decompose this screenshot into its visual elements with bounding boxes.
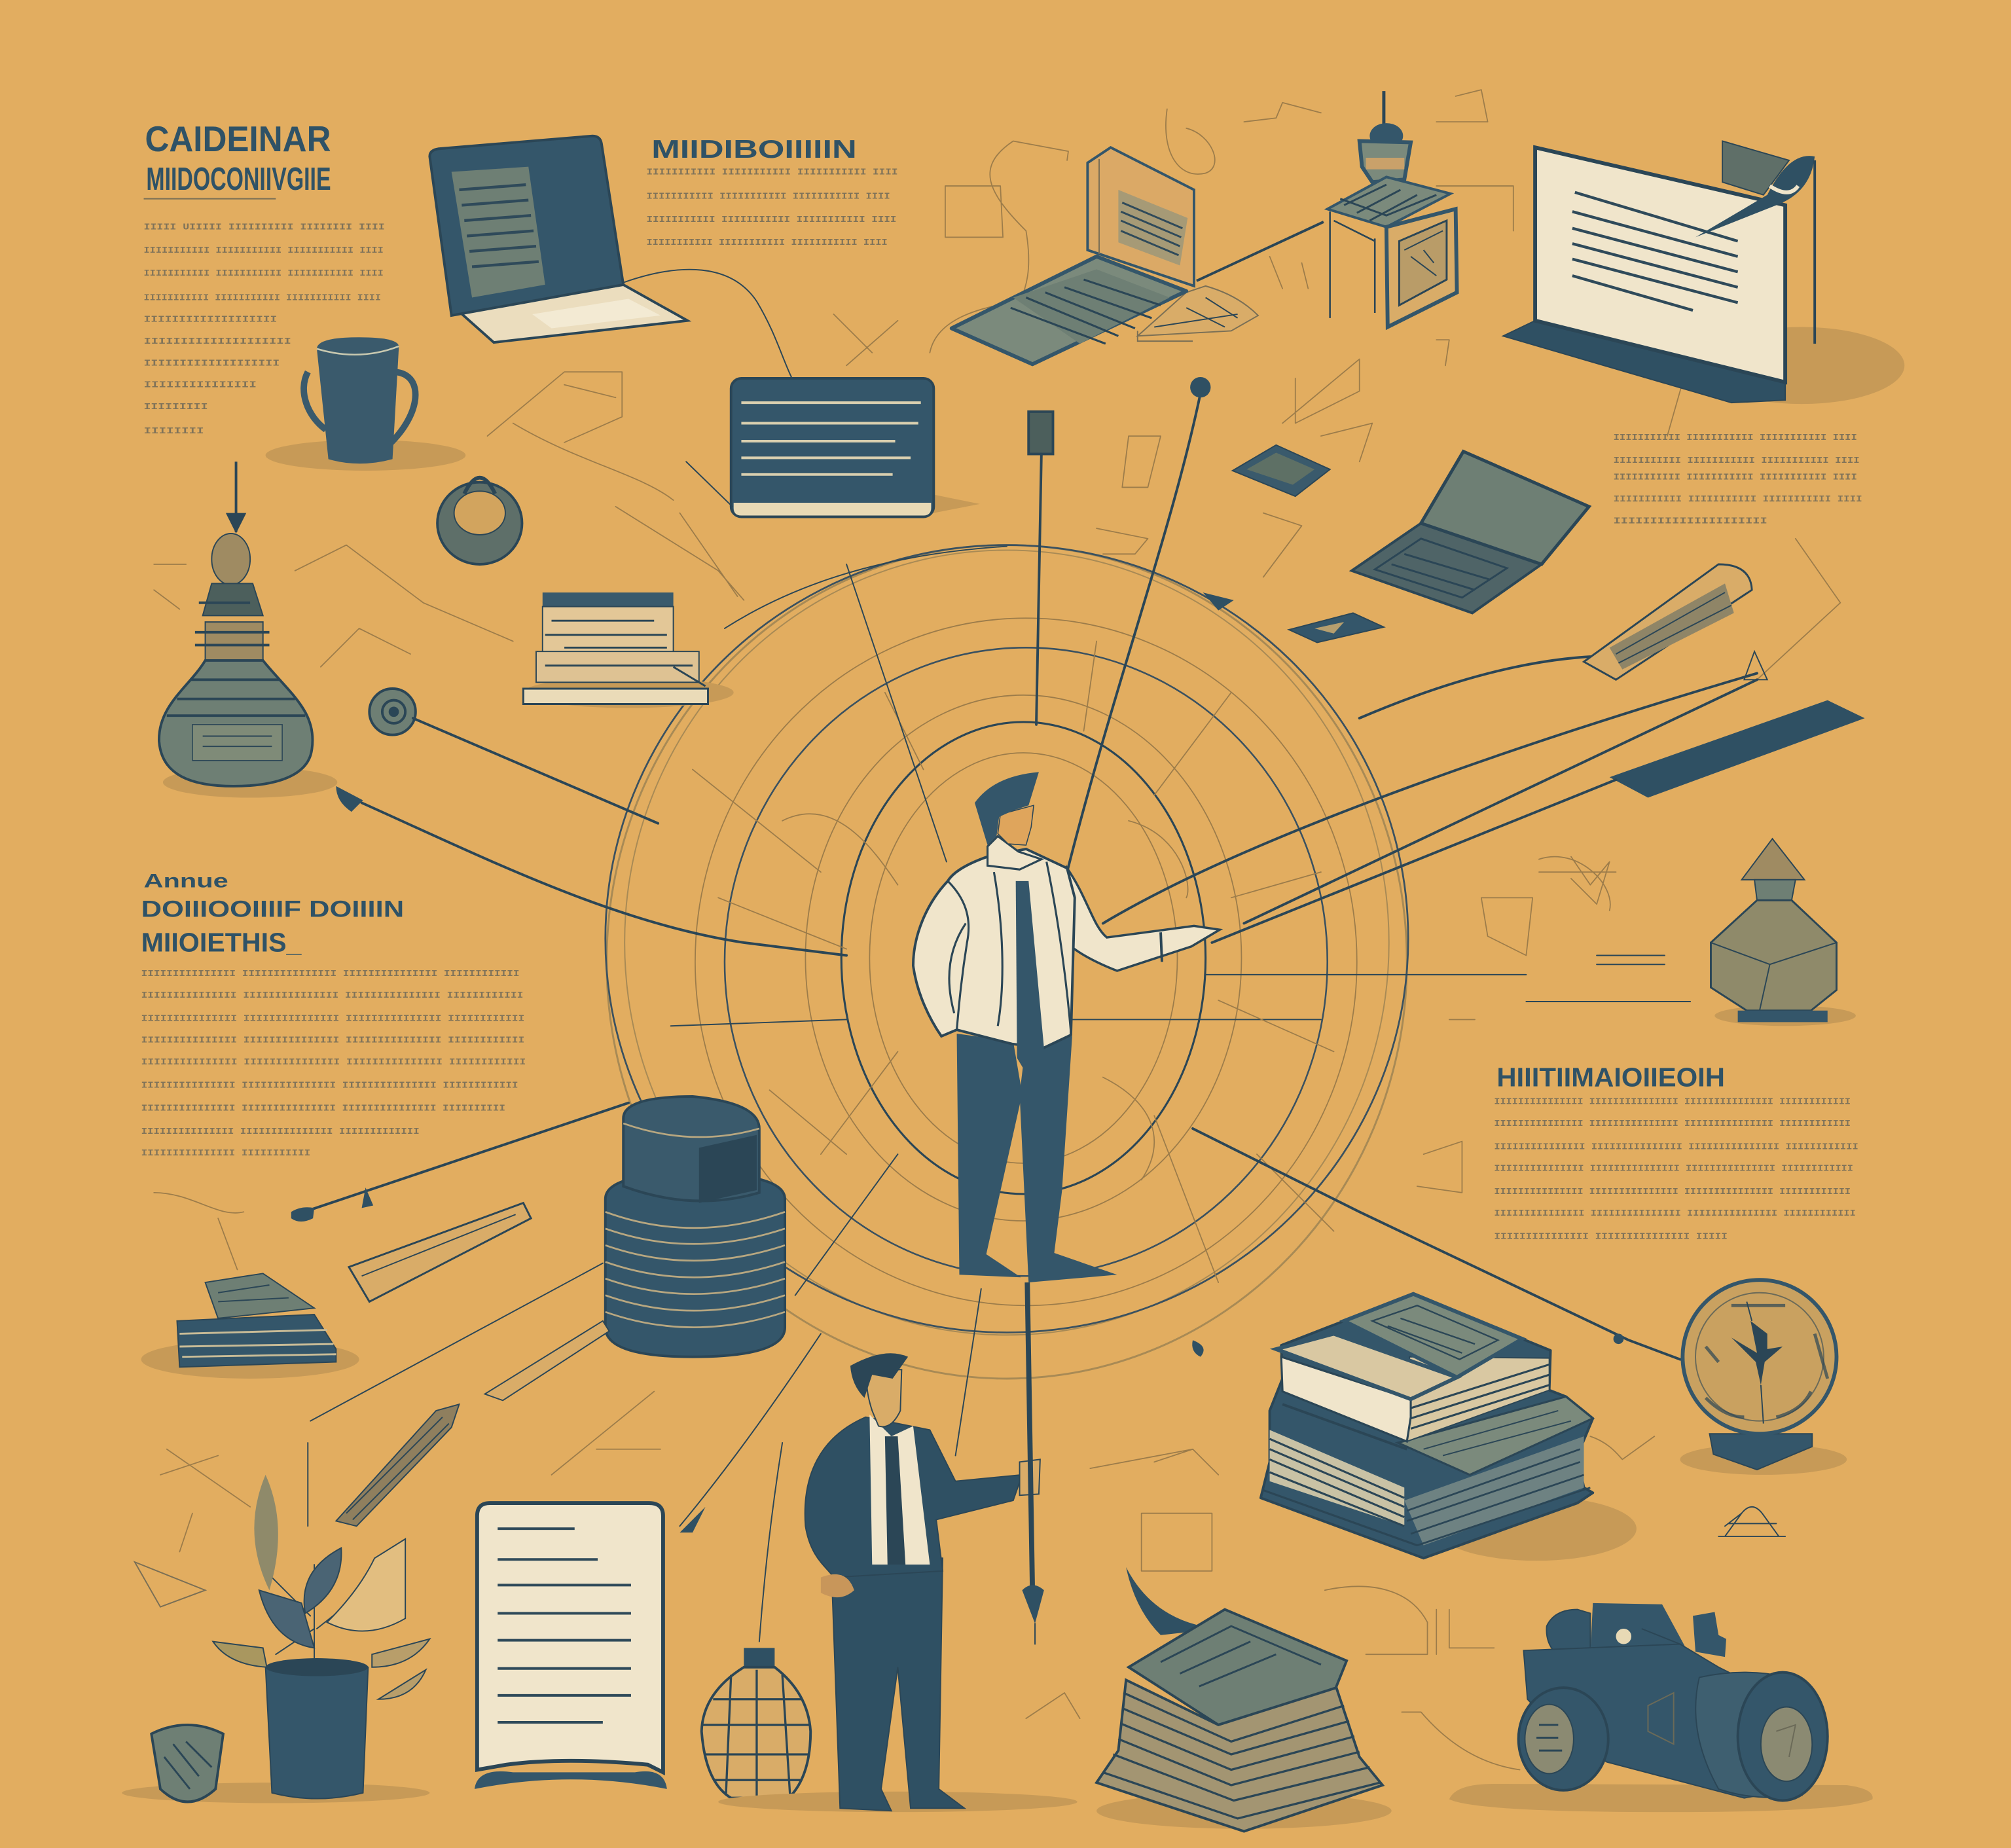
heading lines (141, 871, 404, 958)
body text: IIIII UIIIII IIIIIIIIII IIIIIIII IIII (144, 223, 385, 233)
gray cover (1398, 1396, 1593, 1475)
icon: paper stack bottom (1096, 1567, 1392, 1832)
body text: IIIIIIIIIIIIIII IIIIIIIIIIIIIII IIIII (1494, 1232, 1728, 1242)
right middle text block (1494, 1062, 1858, 1242)
panel: cream document (475, 1503, 667, 1789)
body text (144, 223, 385, 437)
right top text block: IIIIIIIIIII IIIIIIIIIII IIIIIIIIIII IIII (1614, 433, 1857, 443)
body text: IIIIIIIIIIIIIII IIIIIIIIIIIIIII IIIIIIIIIIIIIII IIIIIIIIIIII (1494, 1119, 1851, 1129)
icon: small pen (336, 1321, 609, 1526)
body text (1494, 1098, 1858, 1242)
body text: IIIIIIIIIII IIIIIIIIIII IIIIIIIIIII IIII (646, 168, 897, 177)
heading: MIIDIBOIIIIIN (651, 136, 857, 164)
body text: IIIIIIIIIIIIIII IIIIIIIIIIIIIII IIIIIIIIIIIIIII IIIIIIIIIIII (141, 1014, 524, 1024)
top cover (1344, 1294, 1522, 1377)
shirt (913, 849, 1075, 1048)
icon: potted plant (122, 1443, 429, 1803)
body text: IIIIIIIII (144, 403, 208, 412)
body text: IIIIIIIIIIIIIII (144, 381, 257, 391)
body text: IIIIIIIIIIIIIII IIIIIIIIIIIIIII IIIIIIIIIIIIIII IIIIIIIIIIII (1494, 1209, 1856, 1219)
cream book (1407, 1357, 1549, 1441)
icon: faceted pitcher right (1571, 839, 1856, 1026)
body text: IIIIIIIIIII IIIIIIIIIII IIIIIIIIIII IIII (646, 215, 896, 225)
body text: IIIIIIIIIIIIIII IIIIIIIIIIIIIII IIIIIIIIIIIIIII IIIIIIIIII (141, 1104, 505, 1114)
body text (141, 969, 526, 1159)
icon: pagoda bottle left (159, 462, 337, 798)
arrow: left pins (336, 689, 846, 955)
body text: IIIIIIIIIIIIIII IIIIIIIIIIIIIII IIIIIIIIIIIIIII IIIIIIIIIIII (141, 991, 523, 1001)
icon: mug (266, 337, 465, 471)
body text: IIIIIIIIIIIIIII IIIIIIIIIIIIIII IIIIIIIIIIIIIII IIIIIIIIIIII (1494, 1098, 1851, 1108)
legs (957, 1034, 1022, 1277)
bottom pages (1270, 1430, 1404, 1526)
hair (975, 772, 1039, 845)
icon: small book pile left (141, 1273, 359, 1379)
icon: laptop top left (429, 136, 793, 380)
icon: coil cylinder stack (606, 1096, 785, 1357)
body text (646, 168, 897, 248)
body text: IIIIIIIIIIIIIII IIIIIIIIIIIIIII IIIIIIIIIIIIIII IIIIIIIIIIII (141, 1081, 518, 1091)
body text: IIIIIIIIIIIIIII IIIIIIIIIII (141, 1149, 310, 1159)
heading lines: Annue (144, 871, 228, 892)
body text: IIIIIIIIIIIIIII IIIIIIIIIIIIIII IIIIIIIIIIIIIII IIIIIIIIIIII (1494, 1142, 1858, 1152)
body text: IIIIIIIIIII IIIIIIIIIII IIIIIIIIIII IIII (144, 246, 384, 256)
right top text block (1614, 433, 1862, 526)
body text: IIIIIIIIIII IIIIIIIIIII IIIIIIIIIII IIII (144, 269, 384, 279)
body text: IIIIIIIIIIIIIII IIIIIIIIIIIIIII IIIIIIIIIIIIIII IIIIIIIIIIII (141, 1036, 524, 1046)
body text: IIIIIIIIIIIIIIIIIIII (144, 337, 291, 347)
body text: IIIIIIIIIII IIIIIIIIIII IIIIIIIIIII IIII (646, 238, 888, 248)
icon: cage lantern (702, 1443, 810, 1798)
body text: IIIIIIIIIIIIIIIIIII (144, 316, 277, 325)
right top text block: IIIIIIIIIII IIIIIIIIIII IIIIIIIIIII IIII (1614, 473, 1857, 483)
subtitle: MIIDOCONIIVGIIE (146, 162, 331, 197)
arrows: lower connector lines (291, 1103, 1680, 1532)
body text: IIIIIIIIIIIIIII IIIIIIIIIIIIIII IIIIIIIIIIIII (141, 1127, 420, 1137)
collar (988, 836, 1042, 869)
body text: IIIIIIIIIIIIIII IIIIIIIIIIIIIII IIIIIIIIIIIIIII IIIIIIIIIIII (1494, 1165, 1853, 1174)
top-center text block (646, 136, 897, 248)
icon: pencil bar left (349, 1203, 531, 1301)
body text: IIIIIIIIIIIIIIIIIII (144, 359, 280, 369)
figure: man with staff (718, 1282, 1078, 1812)
icon: small laptop right (1352, 452, 1589, 613)
arm (1067, 868, 1220, 971)
icon: round bag (437, 478, 522, 564)
title block (144, 118, 385, 437)
body text: IIIIIIIIIII IIIIIIIIIII IIIIIIIIIII IIII (144, 293, 381, 303)
panel: dark note card (686, 378, 980, 861)
heading: HIIITIIMAIOIIEOIH (1496, 1062, 1725, 1092)
icon: camera (1449, 1603, 1873, 1812)
sketch background lines (154, 90, 1840, 1769)
radial target rings (606, 545, 1690, 1379)
title: CAIDEINAR (145, 118, 331, 159)
icon: document screen top right (1503, 141, 1904, 404)
body text: IIIIIIIIIII IIIIIIIIIII IIIIIIIIIII IIII (646, 192, 890, 202)
icon: tower lantern top (1328, 91, 1457, 327)
icon: small tablets (1203, 445, 1384, 642)
body text: IIIIIIII (144, 427, 204, 437)
body text: IIIIIIIIIIIIIII IIIIIIIIIIIIIII IIIIIIIIIIIIIII IIIIIIIIIIII (1494, 1187, 1851, 1197)
left middle text block (141, 871, 526, 1159)
body text: IIIIIIIIIIIIIII IIIIIIIIIIIIIII IIIIIIIIIIIIIII IIIIIIIIIIII (141, 969, 520, 979)
figure: central man (913, 772, 1220, 1282)
face (998, 805, 1034, 845)
heading lines: DOIIIOOIIIIF DOIIIIN (141, 897, 404, 922)
right top text block: IIIIIIIIIII IIIIIIIIIII IIIIIIIIIII IIII (1614, 495, 1862, 505)
icon: globe clock (1680, 1280, 1847, 1536)
icon: flag pin center top (1028, 377, 1210, 872)
icon: small cup (151, 1725, 223, 1802)
body text: IIIIIIIIIIIIIII IIIIIIIIIIIIIII IIIIIIIIIIIIIII IIIIIIIIIIII (141, 1058, 526, 1068)
icon: large book stack (1261, 1294, 1637, 1561)
icon: open laptop top center (952, 147, 1324, 364)
right top text block: IIIIIIIIIIIIIIIIIIIII (1614, 516, 1767, 526)
heading lines: MIIOIETHIS_ (141, 928, 302, 958)
icon: book pile center left (523, 592, 734, 708)
right top text block: IIIIIIIIIII IIIIIIIIIII IIIIIIIIIII IIII (1614, 456, 1860, 466)
icon: pencil and blade right (1103, 564, 1865, 943)
tie (1016, 881, 1044, 1090)
